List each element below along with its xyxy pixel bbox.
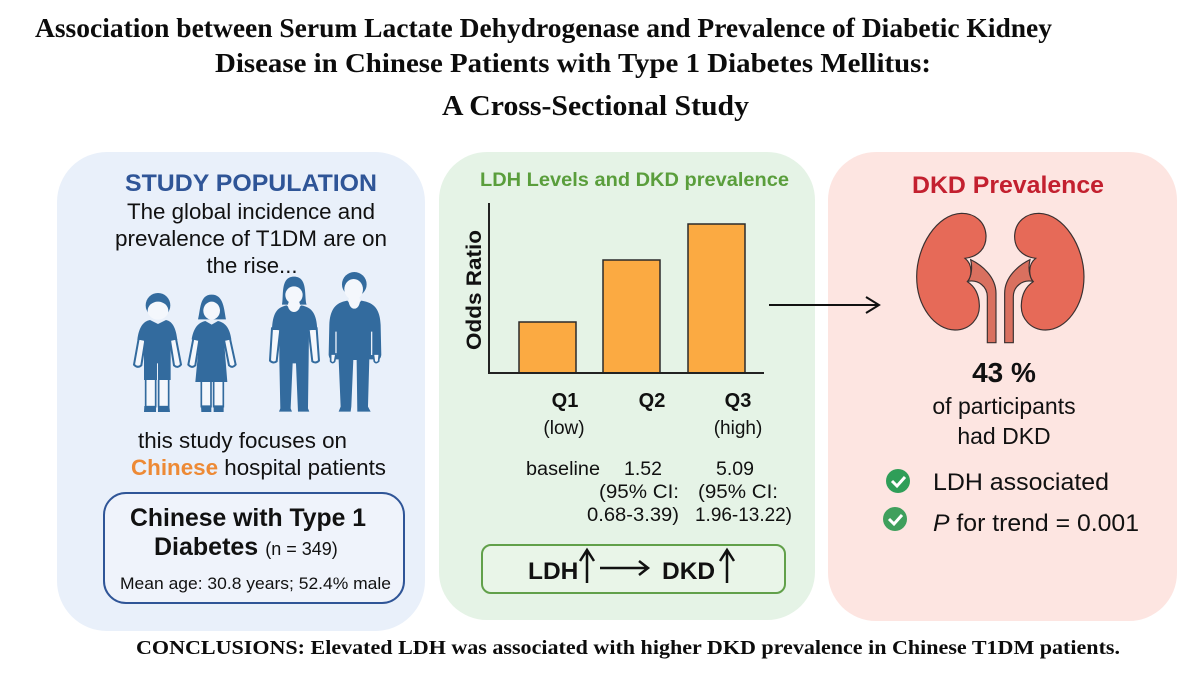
bar chart — [462, 203, 764, 439]
odds ratio values — [526, 459, 792, 526]
panel: DKD prevalence — [828, 152, 1177, 621]
icon: kidneys — [917, 213, 1084, 343]
boy — [134, 293, 181, 412]
text: global incidence: The global incidence and — [127, 199, 375, 224]
box: cohort — [104, 493, 404, 603]
y axis label: Odds Ratio — [462, 230, 486, 350]
odds ratio values: 5.09 — [716, 459, 754, 480]
box: cohort: Mean age: 30.8 years; 52.4% male — [120, 575, 391, 593]
panel background: study population — [57, 152, 425, 631]
category labels: Q3 — [725, 390, 751, 412]
category labels — [543, 390, 762, 439]
heading: DKD prevalence: DKD Prevalence — [912, 172, 1104, 199]
woman — [270, 277, 319, 412]
category labels: Q1 — [552, 390, 578, 412]
heading: LDH levels: LDH Levels and DKD prevalence — [480, 169, 789, 191]
odds ratio values: 0.68-3.39) — [587, 505, 679, 526]
box: cohort: Chinese with Type 1 — [130, 504, 366, 532]
bar: Q2 — [603, 260, 660, 373]
text: study focus: Chinese hospital patients — [131, 455, 386, 480]
panel: LDH levels — [439, 152, 815, 620]
text: global incidence — [115, 199, 387, 278]
icon: family of four people — [134, 272, 381, 412]
item: LDH associated: LDH associated — [933, 469, 1109, 496]
box: LDH up leads to DKD up: DKD — [662, 558, 715, 585]
text: global incidence: prevalence of T1DM are on — [115, 226, 387, 251]
odds ratio values: baseline — [526, 459, 600, 480]
bar: Q3 — [688, 224, 745, 373]
text: study focus — [131, 428, 386, 480]
text: study focus: this study focuses on — [138, 428, 347, 453]
statistic: 43 percent: 43 % — [972, 357, 1036, 388]
odds ratio values: (95% CI: — [698, 482, 778, 503]
arrow: chart to DKD prevalence — [769, 297, 879, 313]
girl — [188, 295, 236, 412]
man — [329, 272, 381, 412]
text: global incidence: the rise... — [206, 253, 298, 278]
odds ratio values: (95% CI: — [599, 482, 679, 503]
panel: study population — [57, 152, 425, 631]
statistic: 43 percent: of participants — [932, 393, 1076, 419]
title — [35, 12, 1052, 122]
title: Disease in Chinese Patients with Type 1 Diabetes Mellitus: — [215, 47, 931, 78]
category labels: Q2 — [639, 390, 665, 412]
odds ratio values: 1.52 — [624, 459, 662, 480]
heading: study population: STUDY POPULATION — [125, 170, 377, 197]
panel background: LDH levels — [439, 152, 815, 620]
axes — [489, 203, 764, 373]
title: Association between Serum Lactate Dehydrogenase and Prevalence of Diabetic Kidney — [35, 12, 1052, 43]
category labels: (high) — [714, 418, 762, 439]
title: A Cross-Sectional Study — [442, 90, 750, 122]
category labels: (low) — [543, 418, 585, 439]
box: cohort: Diabetes (n = 349) — [154, 533, 338, 561]
box: LDH up leads to DKD up: LDH — [528, 558, 578, 585]
right kidney — [1005, 213, 1084, 343]
left kidney — [917, 213, 996, 343]
statistic: 43 percent: had DKD — [957, 423, 1051, 449]
panel background: DKD prevalence — [828, 152, 1177, 621]
odds ratio values: 1.96-13.22) — [695, 505, 792, 526]
bar: Q1 — [519, 322, 576, 373]
box: LDH up leads to DKD up — [482, 545, 785, 593]
statistic: 43 percent — [932, 357, 1076, 449]
item: P for trend: P for trend = 0.001 — [933, 510, 1139, 537]
conclusions: CONCLUSIONS: Elevated LDH was associated with higher DKD prevalence in Chinese T1DM patients. — [136, 637, 1120, 659]
